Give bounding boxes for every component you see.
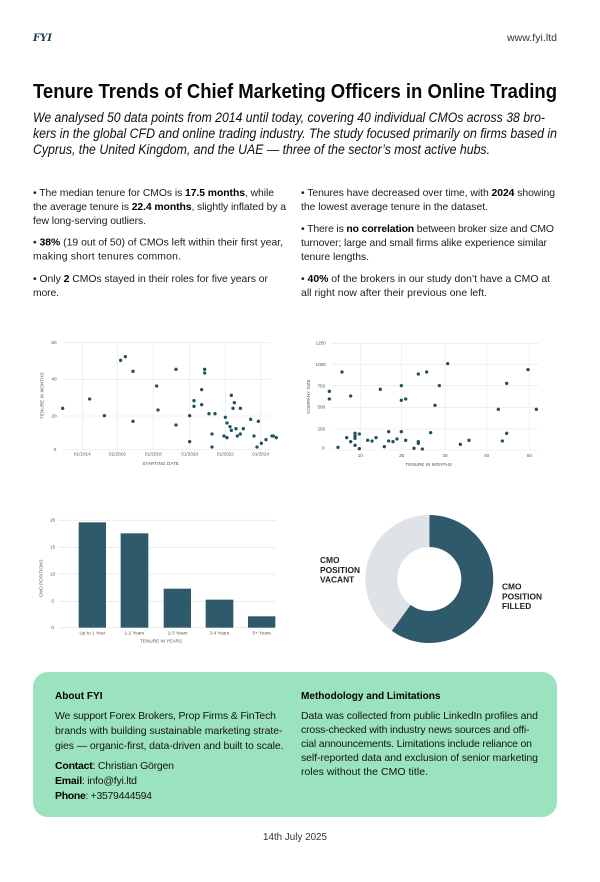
key findings right column: • Tenures have decreased over time, with 2024 showing [301,188,555,199]
scatter chart: company size by tenure: 1000 [315,362,326,367]
scatter chart: tenure by starting date: TENURE IN MONTHS [39,372,44,419]
bar chart: CMO positions by tenure: 2-3 Years [168,630,188,635]
about text [55,710,284,752]
methodology heading: Methodology and Limitations [301,690,441,702]
donut label: filled: CMO [502,582,522,592]
donut label: filled: FILLED [502,601,531,611]
scatter chart: tenure by starting date: STARTING DATE [142,461,179,466]
bar chart: CMO positions by tenure: Up to 1 Year [80,630,106,635]
scatter chart: company size by tenure: 1250 [315,341,326,346]
key findings right column: all right now after their previous one left. [301,288,487,299]
scatter chart: tenure by starting date: 01/2024 [252,451,269,456]
footer panel [33,672,557,817]
bar chart: CMO positions by tenure: 15 [50,545,56,550]
donut segment: filled [392,515,493,643]
key findings left column: few long-serving outliers. [33,216,146,227]
scatter chart: tenure by starting date: 01/2020 [181,451,198,456]
intro paragraph: We analysed 50 data points from 2014 until today, covering 40 individual CMOs across 38 bro- [33,110,545,125]
key findings right column: tenure lengths. [301,252,369,263]
intro paragraph: kers in the global CFD and online trading industry. The study focused primarily on firms based in [33,126,557,141]
bar chart: CMO positions by tenure: 5 [51,599,54,604]
contact details: Phone: +3579444594 [55,790,152,802]
key findings right column: turnover; large and small firms alike experience similar [301,238,548,249]
date: 14th July 2025 [263,832,327,843]
key findings right column [301,188,555,299]
header website: www.fyi.ltd [506,33,557,44]
key findings left column: • The median tenure for CMOs is 17.5 months, while [33,188,274,199]
bar chart: CMO positions by tenure: 5+ Years [253,630,271,635]
scatter chart: tenure by starting date: 01/2018 [145,451,162,456]
scatter chart: tenure by starting date: 0 [54,447,57,452]
donut label: filled: POSITION [502,592,542,602]
donut label: vacant [320,555,360,584]
methodology text: self-reported data and exclusion of senior marketing [301,752,538,764]
scatter chart: tenure by starting date: 40 [51,377,57,382]
bar chart: CMO positions by tenure: 3-4 Years [209,630,230,635]
about text: We support Forex Brokers, Prop Firms & FinTech [55,710,276,722]
key findings left column: • 38% (19 out of 50) of CMOs left within their first year, [33,238,283,248]
methodology text: cross-checked with industry news sources and offi- [301,724,530,736]
scatter chart: company size by tenure: 750 [317,383,326,388]
donut chart: CMO position status [320,515,542,643]
key findings right column: the lowest average tenure in the dataset. [301,202,488,213]
key findings left column: the average tenure is 22.4 months, slightly inflated by a [33,202,286,213]
methodology text: roles without the CMO title. [301,766,428,778]
scatter chart: company size by tenure: 40 [484,453,490,458]
scatter chart: company size by tenure: 10 [358,453,363,458]
key findings left column [33,188,286,299]
scatter chart: company size by tenure: TENURE IN MONTHS [405,462,452,467]
scatter chart: company size by tenure: COMPANY SIZE [306,379,311,414]
donut segment: vacant [365,515,429,631]
scatter chart: company size by tenure: 50 [527,453,532,458]
methodology text [301,710,538,778]
intro paragraph [33,110,557,157]
key findings right column: • 40% of the brokers in our study don’t have a CMO at [301,274,550,285]
scatter chart: tenure by starting date: 01/2022 [217,451,234,456]
scatter chart: company size by tenure: 500 [317,405,326,410]
scatter chart: tenure by starting date [39,340,278,466]
bar chart: CMO positions by tenure: CMO POSITIONS [38,560,43,597]
bar chart: CMO positions by tenure [38,518,276,644]
contact details: Contact: Christian Görgen [55,760,174,772]
scatter chart: tenure by starting date: 01/2014 [74,451,91,456]
donut label: vacant: POSITION [320,565,360,575]
bar chart: CMO positions by tenure: 10 [50,571,56,576]
title: Tenure Trends of Chief Marketing Officers in Online Trading [33,80,557,103]
donut label: filled [502,582,542,611]
key findings left column: • Only 2 CMOs stayed in their roles for five years or [33,274,269,285]
scatter chart: company size by tenure: 20 [399,453,405,458]
methodology text: Data was collected from public LinkedIn profiles and [301,710,538,722]
key findings left column: making short tenures common. [33,252,181,262]
bar chart: CMO positions by tenure: 1-2 Years [124,630,145,635]
contact details [55,760,174,802]
scatter chart: tenure by starting date: 60 [51,340,57,345]
contact details: Email: info@fyi.ltd [55,775,137,787]
header logo: FYI [32,32,53,44]
scatter chart: tenure by starting date: 01/2016 [109,451,126,456]
scatter chart: company size by tenure: 0 [322,445,325,450]
bar chart: CMO positions by tenure: 20 [50,518,56,523]
bar chart: CMO positions by tenure: 0 [51,625,54,630]
scatter chart: company size by tenure [306,341,538,467]
about heading: About FYI [55,690,103,702]
methodology text: cial announcements. Limitations include reliance on [301,738,532,750]
key findings left column: more. [33,288,59,299]
key findings right column: • There is no correlation between broker size and CMO [301,224,554,235]
about text: brands with building sustainable marketing strate- [55,725,283,737]
scatter chart: company size by tenure: 30 [442,453,448,458]
about text: gies — organic-first, data-driven and built to scale. [55,740,284,752]
bar chart: CMO positions by tenure: TENURE IN YEARS [140,639,182,644]
donut label: vacant: CMO [320,555,340,565]
donut label: vacant: VACANT [320,574,355,584]
intro paragraph: Cyprus, the United Kingdom, and the UAE — three of the sector’s most active hubs. [33,142,490,157]
scatter chart: company size by tenure: 250 [317,426,326,431]
scatter chart: tenure by starting date: 20 [51,413,57,418]
